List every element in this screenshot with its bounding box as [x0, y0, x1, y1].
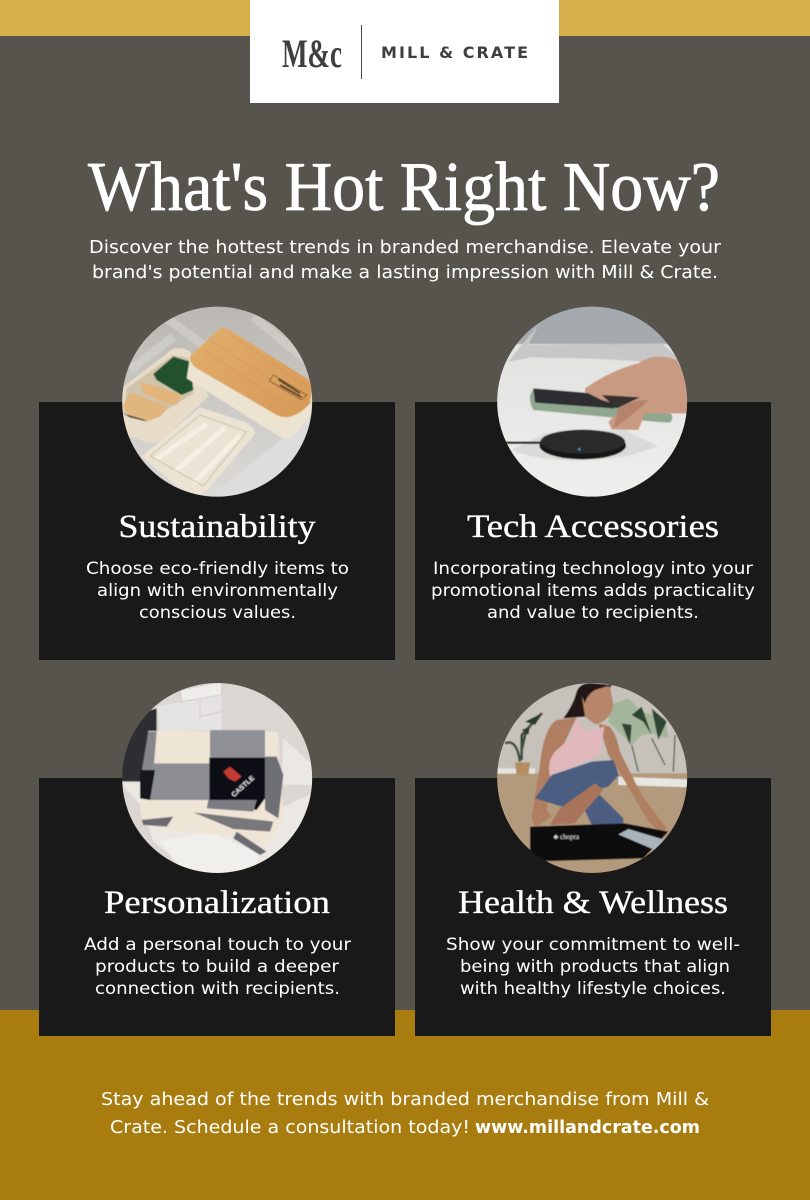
intro text: [89, 238, 722, 283]
body text: conscious values.: [139, 603, 296, 623]
photo: wireless charger: [497, 306, 688, 497]
heading: Sustainability: [118, 509, 316, 545]
intro text: brand's potential and make a lasting impression with Mill & Crate.: [92, 263, 718, 283]
logo card: [250, 0, 559, 103]
body text: align with environmentally: [97, 581, 338, 601]
body text: with healthy lifestyle choices.: [460, 979, 726, 999]
body text: and value to recipients.: [487, 603, 699, 623]
left arm and shoulder: [532, 718, 577, 828]
panel: sustainability: [39, 402, 395, 660]
right arm and shoulder: [598, 723, 667, 833]
body text: connection with recipients.: [95, 979, 340, 999]
body text: Incorporating technology into your: [433, 559, 753, 579]
body text: being with products that align: [460, 957, 730, 977]
title: What's Hot Right Now?: [88, 149, 720, 226]
body text: products to build a deeper: [95, 957, 339, 977]
body text: [86, 559, 349, 623]
heading: Personalization: [104, 885, 330, 921]
logo wordmark: MILL & CRATE: [381, 43, 528, 62]
panel: personalization: [39, 778, 395, 1036]
body text: Show your commitment to well-: [446, 935, 740, 955]
photo: yoga mat: [497, 683, 688, 873]
footer call to action: Crate. Schedule a consultation today!: [110, 1118, 470, 1138]
footer call to action: [101, 1090, 709, 1138]
body text: [431, 559, 755, 623]
body text: promotional items adds practicality: [431, 581, 755, 601]
heading: Tech Accessories: [467, 509, 719, 545]
body text: Choose eco-friendly items to: [86, 559, 349, 579]
panel: tech accessories: [415, 402, 771, 660]
intro text: Discover the hottest trends in branded merchandise. Elevate your: [89, 238, 722, 258]
photo: personalized blanket: CASTLE: [231, 775, 256, 799]
panel: health and wellness: [415, 778, 771, 1036]
body text: Add a personal touch to your: [84, 935, 351, 955]
photo: bento box: [122, 306, 312, 497]
website link: www.millandcrate.com: [475, 1118, 700, 1138]
heading: Health & Wellness: [458, 885, 728, 921]
top gold band: [0, 0, 810, 36]
photo: personalized blanket: [122, 683, 312, 873]
body text: [446, 935, 740, 999]
body text: [84, 935, 351, 999]
logo monogram: M&c: [282, 31, 342, 76]
bottom gold band: [0, 1010, 810, 1200]
photo: yoga mat: ♣ chopra: [554, 833, 580, 841]
footer call to action: Stay ahead of the trends with branded merchandise from Mill &: [101, 1090, 709, 1110]
